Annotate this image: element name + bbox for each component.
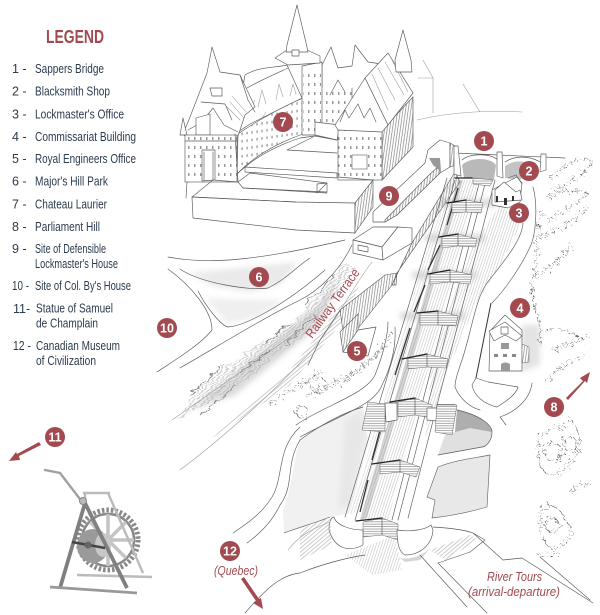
marker 12: 12 (223, 544, 237, 558)
marker 6 (249, 267, 269, 287)
map number markers (45, 112, 564, 561)
arched wing facade (237, 98, 303, 174)
arrow to Parliament Hill (566, 372, 590, 400)
legend item 8: 8 - (12, 220, 27, 234)
legend item 7 (12, 198, 107, 212)
legend item 2: Blacksmith Shop (35, 84, 110, 98)
legend item 9: 9 - (12, 242, 27, 256)
marker 9 (379, 186, 399, 206)
legend item 7: Chateau Laurier (35, 198, 107, 212)
marker 2: 2 (526, 164, 533, 178)
marker 5: 5 (354, 344, 361, 358)
legend item 7: 7 - (12, 198, 27, 212)
legend item 12: Canadian Museum (36, 339, 120, 353)
right block side wing (382, 97, 413, 180)
legend item 1: Sappers Bridge (35, 62, 104, 76)
long hatched wall (392, 172, 460, 285)
legend item 4: 4 - (12, 130, 27, 144)
legend item 2 (12, 84, 110, 98)
legend item 3: 3 - (12, 108, 27, 122)
Lockmaster's Office and Blacksmith Shop (492, 175, 522, 208)
left block roof (183, 47, 255, 136)
legend item 6: 6 - (12, 174, 27, 188)
marker 1 (474, 131, 494, 151)
stepped podium (192, 177, 373, 197)
legend item 10: 10 - (12, 279, 29, 293)
right bank shading (425, 205, 522, 440)
ravine shading (190, 275, 340, 410)
marker 4: 4 (517, 302, 524, 316)
courtyard wall (476, 303, 491, 378)
legend panel (12, 27, 136, 368)
Royal Engineers Office foundation (340, 314, 376, 356)
legend item 5: Royal Engineers Office (35, 152, 136, 166)
Trees along the escarpment (532, 159, 592, 556)
rear frame (77, 492, 152, 577)
legend item 8: Parliament Hill (35, 220, 100, 234)
path beside canal (455, 223, 523, 410)
arrow to Statue of Samuel de Champlain (9, 442, 41, 461)
Shoreline and river dock (245, 522, 593, 613)
left bank shading (350, 180, 455, 515)
gate shadows (400, 199, 498, 320)
label: River Tours: River Tours (487, 569, 542, 584)
marker 11: 11 (48, 430, 62, 444)
legend item 5: 5 - (12, 152, 27, 166)
label: Quebec: (Quebec) (214, 563, 258, 578)
legend item 11: de Champlain (36, 316, 98, 330)
Terrace walls beside the canal (308, 140, 460, 365)
legend item 9 (12, 242, 118, 271)
distant Parliament Hill outline (417, 60, 522, 120)
legend item 1: 1 - (12, 62, 27, 76)
marker 9: 9 (386, 190, 393, 204)
gear wheel (77, 510, 138, 570)
legend item 6 (12, 174, 109, 188)
legend item 12: of Civilization (36, 354, 96, 368)
marker 12 (220, 541, 240, 561)
legend item 11: Statue of Samuel (36, 302, 113, 316)
legend item 4: Commissariat Building (35, 130, 136, 144)
marker 8 (544, 397, 564, 417)
grounds: Major's Hill Park, roads and ravine (157, 240, 395, 543)
right block front (338, 130, 382, 180)
arched rear wing roof (238, 65, 302, 132)
legend item 2: 2 - (12, 84, 27, 98)
label: arrival-departure: (arrival-departure) (468, 584, 560, 599)
marker 4 (510, 298, 530, 318)
marker 11 (45, 427, 65, 447)
lawn south of ravine (283, 407, 368, 533)
marker 3: 3 (516, 206, 523, 220)
marker 2 (519, 161, 539, 181)
legend item 4 (12, 130, 136, 144)
legend item 9: Lockmaster's House (35, 257, 118, 271)
Right lawn patch (427, 455, 490, 518)
Sappers Bridge (454, 146, 565, 180)
legend item 3 (12, 108, 124, 122)
marker 8: 8 (551, 400, 558, 414)
legend item 12: 12 - (13, 339, 31, 353)
A-frame legs (60, 503, 127, 588)
marker 1: 1 (481, 134, 488, 148)
marker 3 (509, 203, 529, 223)
base skids (50, 587, 137, 593)
road curves (233, 427, 300, 533)
far central wings behind right block (322, 45, 395, 130)
canal water (360, 180, 478, 520)
marker 10 (157, 318, 177, 338)
lower block (353, 227, 398, 247)
label: Railway Terrace: Railway Terrace (302, 266, 363, 341)
marker 6: 6 (256, 270, 263, 284)
legend item 10: Site of Col. By's House (35, 279, 131, 293)
legend item 9: Site of Defensible (35, 242, 106, 256)
legend item 5 (12, 152, 136, 166)
Commissariat Building (472, 303, 540, 425)
legend item 8 (12, 220, 100, 234)
legend item 12 (13, 339, 120, 368)
marker 7: 7 (280, 116, 287, 130)
Mid-flight lock stairs (362, 402, 492, 455)
Bottom basin walls (300, 517, 433, 575)
left block front wall (185, 135, 237, 182)
marker 7 (273, 112, 293, 132)
Chateau Laurier (180, 5, 522, 233)
marker 5 (347, 341, 367, 361)
legend item 11: 11- (13, 302, 30, 316)
central tower (275, 5, 322, 135)
canal left walls (345, 178, 455, 520)
Rideau canal flight of locks (245, 146, 593, 613)
legend item 3: Lockmaster's Office (35, 108, 124, 122)
Major's Hill foliage (270, 332, 392, 418)
right spire (395, 30, 412, 72)
legend item 10 (12, 279, 131, 293)
arrow to Canadian Museum of Civilization (241, 577, 263, 609)
canal right walls (392, 180, 495, 520)
Lock gates (356, 178, 493, 540)
courtyard block (315, 122, 340, 140)
legend item 6: Major's Hill Park (35, 174, 109, 188)
legend item 11 (13, 302, 113, 330)
legend title: LEGEND (46, 27, 104, 47)
marker 10: 10 (160, 322, 174, 336)
legend item 1 (12, 62, 104, 76)
courtyard lines and terraces (287, 137, 337, 153)
Winch statue (45, 470, 152, 593)
